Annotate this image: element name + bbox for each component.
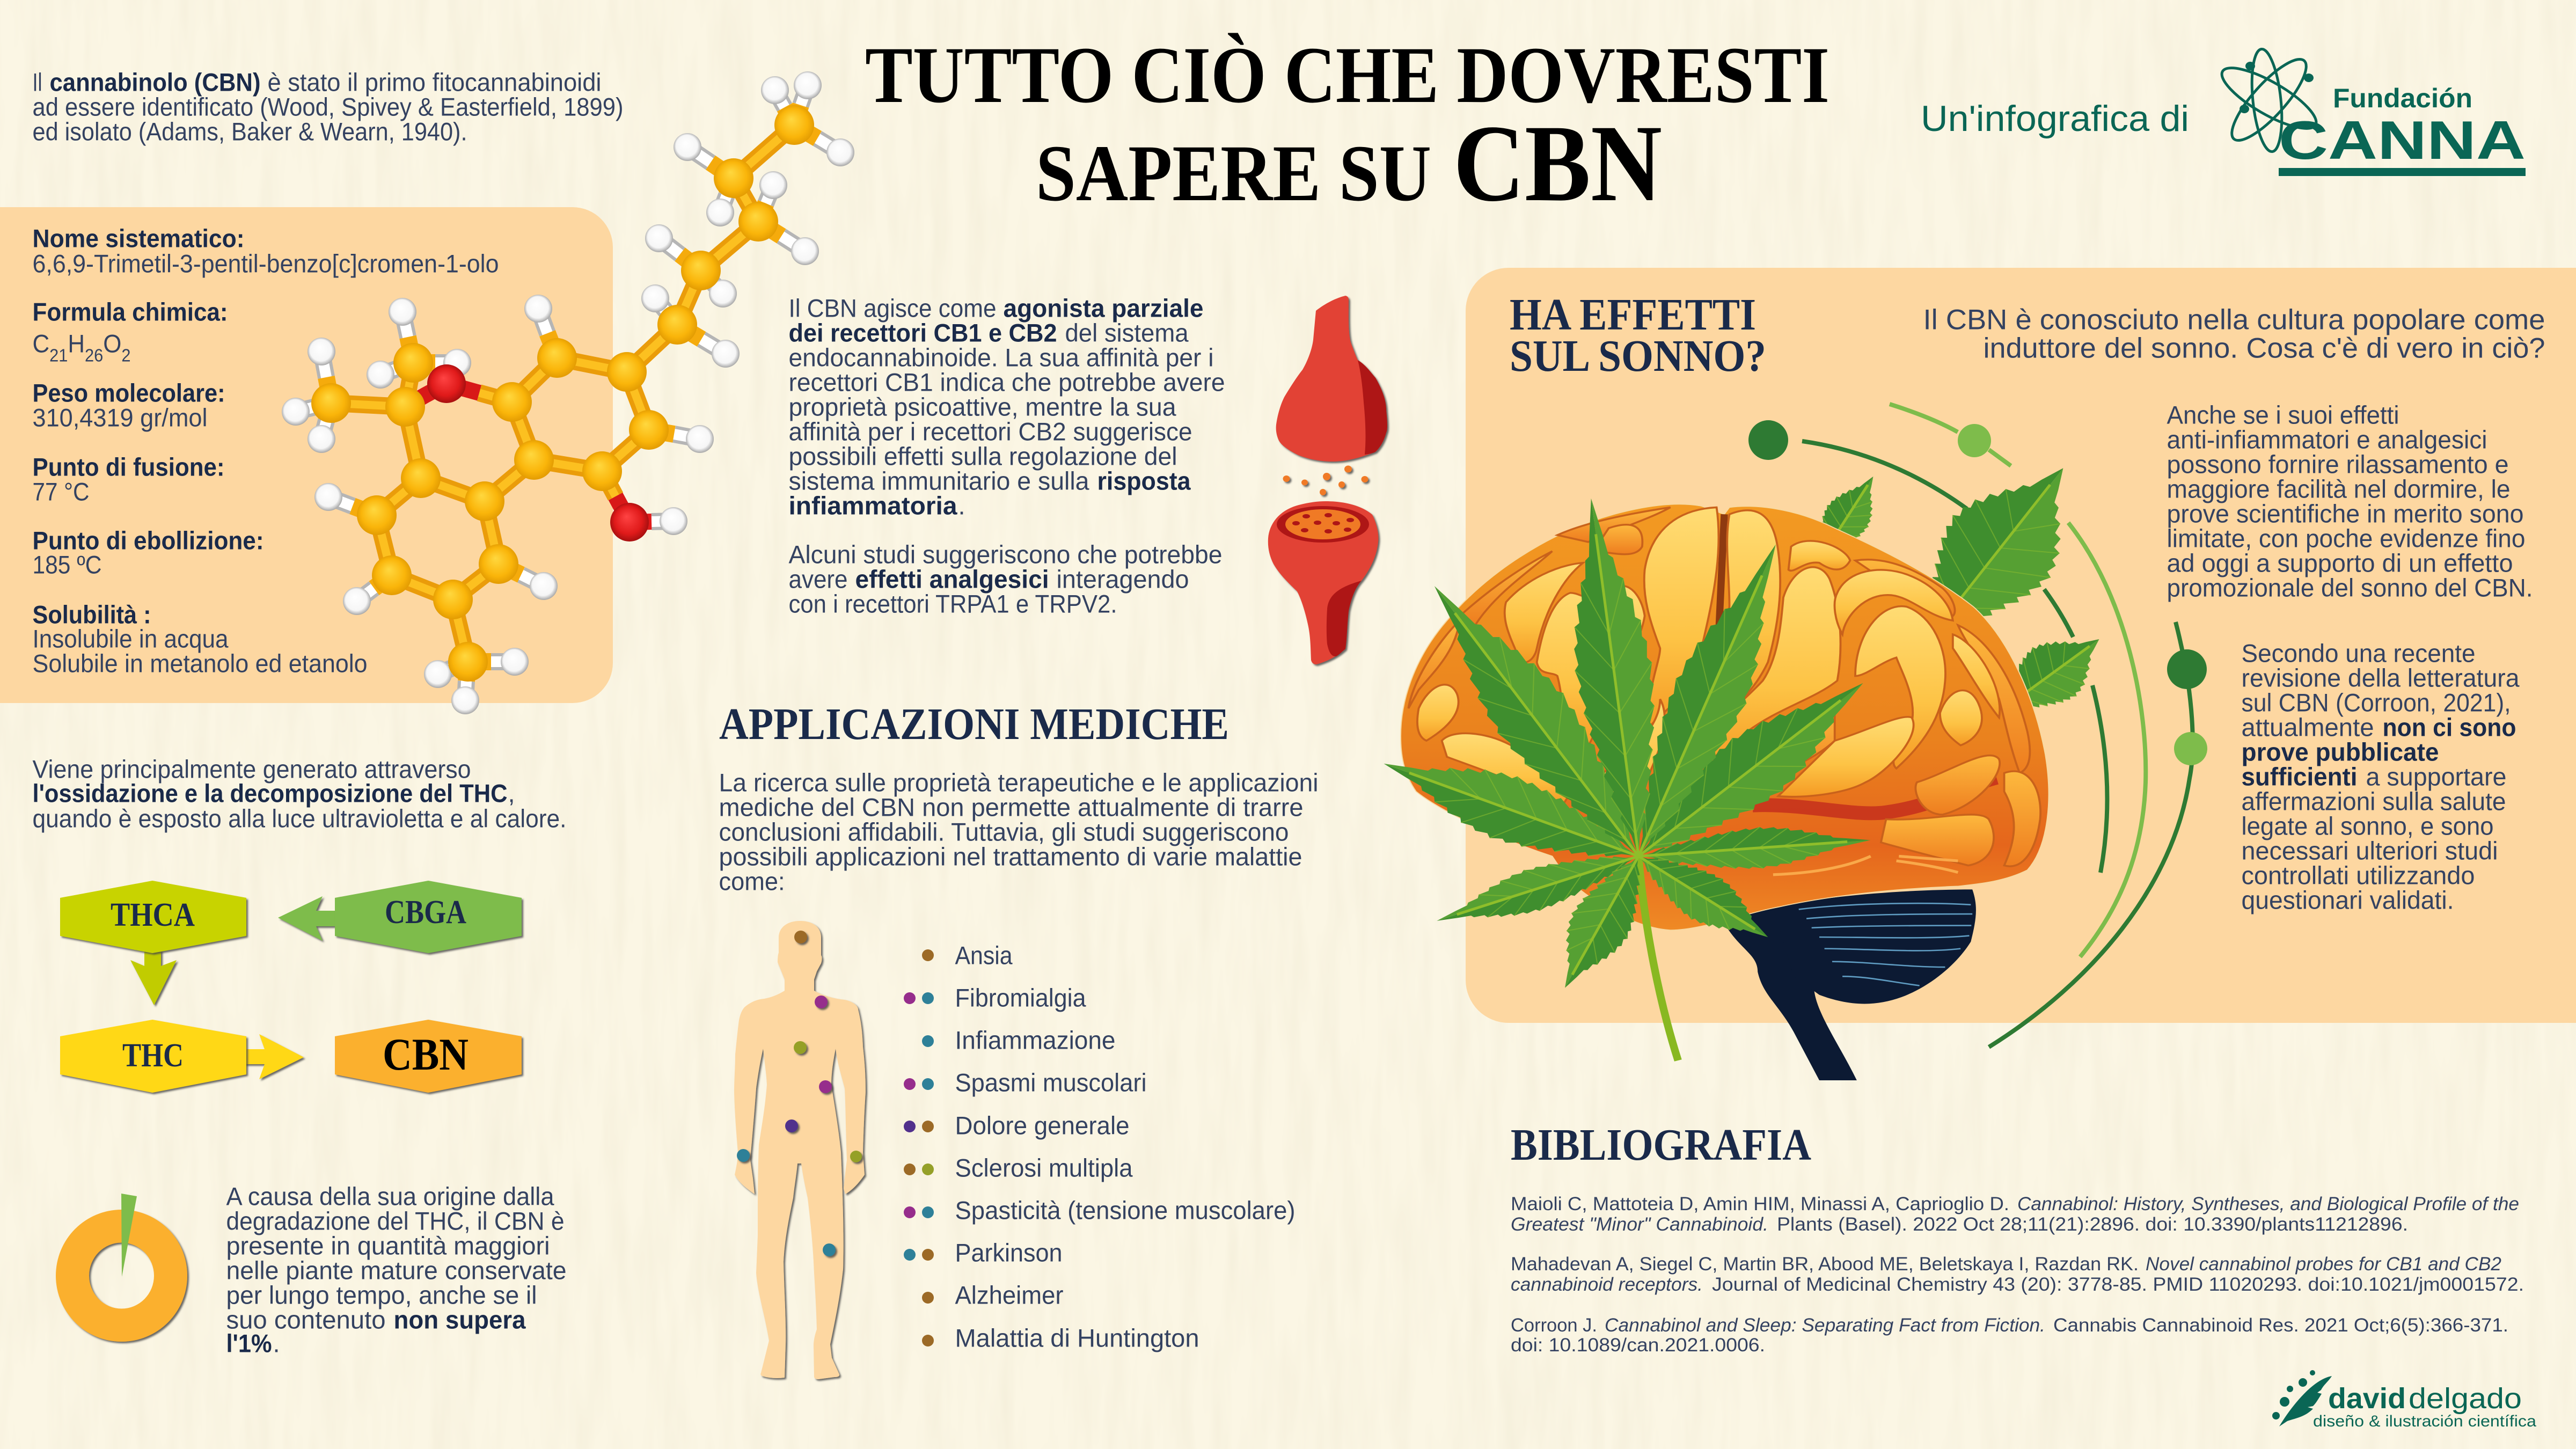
text: literature review: prove pubblicate xyxy=(2241,737,2439,766)
text: how CBN forms: l'ossidazione e la decomposizione del THC xyxy=(32,779,508,807)
text: sleep question xyxy=(1923,304,2545,364)
title: TUTTO CIÒ CHE DOVRESTI xyxy=(865,31,1829,120)
text: how CBN acts: recettori CB1 indica che potrebbe avere xyxy=(789,368,1225,396)
logo: Fundación CANNA: Fundación xyxy=(2333,83,2472,113)
bibliography references: Maioli C, Mattoteia D, Amin HIM, Minassi A, Caprioglio D. xyxy=(1511,1194,2009,1214)
box: THC xyxy=(60,1020,246,1093)
brain hemispheres xyxy=(1401,504,2048,930)
text: medical applications intro: conclusioni affidabili. Tuttavia, gli studi suggeriscono xyxy=(719,818,1289,846)
bibliography references: Cannabinol: History, Syntheses, and Biological Profile of the xyxy=(2017,1194,2519,1214)
list of conditions: Fibromialgia xyxy=(955,983,1086,1012)
text: anti-inflammatory effects xyxy=(2167,400,2533,602)
box: CBGA: CBGA xyxy=(385,894,466,931)
list of conditions: Spasticità (tensione muscolare) xyxy=(955,1196,1296,1225)
box: THCA xyxy=(60,881,246,953)
panel: chemical properties xyxy=(0,207,613,703)
bibliography references: cannabinoid receptors. xyxy=(1511,1274,1703,1295)
arrow: THC to CBN xyxy=(243,1034,304,1079)
chemical properties list: C xyxy=(32,330,50,357)
human body with marked points xyxy=(734,921,866,1379)
icon: synapse xyxy=(1268,296,1387,664)
title: SAPERE SU xyxy=(1036,129,1431,218)
chemical properties list: Solubile in metanolo ed etanolo xyxy=(32,649,367,677)
logo: david delgado xyxy=(2272,1370,2536,1430)
logo: david delgado: diseño & ilustración científica xyxy=(2313,1413,2536,1430)
list of conditions: Alzheimer xyxy=(955,1280,1064,1309)
text: how CBN acts: dei recettori CB1 e CB2 xyxy=(789,319,1057,347)
text: how CBN acts: effetti analgesici xyxy=(855,565,1049,594)
text: anti-inflammatory effects: promozionale del sonno del CBN. xyxy=(2167,573,2533,602)
chemical properties list: Solubilità : xyxy=(32,600,151,629)
text: how CBN acts: . xyxy=(958,492,965,519)
text: medical applications intro xyxy=(719,769,1318,895)
text: how CBN acts: interagendo xyxy=(1056,565,1189,594)
chemical properties list xyxy=(32,224,499,677)
bibliography references: Greatest "Minor" Cannabinoid. xyxy=(1511,1214,1768,1235)
text: anti-inflammatory effects: prove scientifiche in merito sono xyxy=(2167,499,2523,528)
text: how CBN acts: con i recettori TRPA1 e TRPV2. xyxy=(789,589,1117,618)
bibliography references: doi: 10.1089/can.2021.0006. xyxy=(1511,1335,1765,1356)
text: CBN content: degradazione del THC, il CBN è xyxy=(226,1206,565,1235)
text: how CBN acts: endocannabinoide. La sua affinità per i xyxy=(789,343,1214,371)
box: THCA: THCA xyxy=(111,897,195,933)
text: CBN content xyxy=(226,1182,567,1358)
background leaves xyxy=(1798,437,2121,733)
bibliography references: Cannabinol and Sleep: Separating Fact from Fiction. xyxy=(1605,1315,2045,1336)
intro text: Il xyxy=(32,68,42,97)
text: how CBN acts: possibili effetti sulla regolazione del xyxy=(789,442,1177,470)
intro text xyxy=(32,68,624,146)
heading: medical applications: APPLICAZIONI MEDICHE xyxy=(719,699,1229,749)
panel: sleep effects xyxy=(1466,268,2576,1023)
list of conditions: Sclerosi multipla xyxy=(955,1154,1133,1182)
list of conditions xyxy=(904,941,1296,1352)
text: how CBN acts: proprietà psicoattive, mentre la sua xyxy=(789,393,1176,421)
list of conditions: Infiammazione xyxy=(955,1026,1115,1054)
box: CBN xyxy=(335,1020,522,1093)
chemical properties list: 6,6,9-Trimetil-3-pentil-benzo[c]cromen-1-olo xyxy=(32,249,499,278)
text: anti-inflammatory effects: possono fornire rilassamento e xyxy=(2167,450,2508,479)
chemical properties list: Punto di ebollizione: xyxy=(32,526,264,555)
text: how CBN forms: , xyxy=(508,779,515,807)
chemical properties list: 2 xyxy=(121,346,131,365)
text: literature review: sul CBN (Corroon, 2021), xyxy=(2241,688,2511,717)
text: CBN content: . xyxy=(273,1329,280,1358)
intro text: cannabinolo (CBN) xyxy=(49,68,261,97)
bibliography references: Novel cannabinol probes for CB1 and CB2 xyxy=(2146,1254,2501,1275)
text: anti-inflammatory effects: anti-infiammatori e analgesici xyxy=(2167,425,2487,454)
chemical properties list: Formula chimica: xyxy=(32,297,228,326)
chemical properties list: Punto di fusione: xyxy=(32,453,224,481)
text: anti-inflammatory effects: ad oggi a supporto di un effetto xyxy=(2167,548,2513,577)
intro text: è stato il primo fitocannabinoidi xyxy=(267,68,601,97)
logo: david delgado: david xyxy=(2328,1382,2406,1415)
text: medical applications intro: mediche del CBN non permette attualmente di trarre xyxy=(719,793,1303,821)
text: how CBN acts: affinità per i recettori CB2 suggerisce xyxy=(789,418,1192,445)
chemical properties list: 77 °C xyxy=(32,478,89,506)
diagram: cannabinoid pathway xyxy=(60,881,522,1093)
text: how CBN acts: risposta xyxy=(1097,467,1191,495)
title xyxy=(865,31,1829,224)
bibliography references: Plants (Basel). 2022 Oct 28;11(21):2896. doi: 10.3390/plants11212896. xyxy=(1777,1214,2408,1235)
list of conditions: Parkinson xyxy=(955,1239,1063,1267)
chemical properties list: Peso molecolare: xyxy=(32,379,225,407)
text: how CBN acts: Il CBN agisce come xyxy=(789,294,996,322)
chemical properties list: O xyxy=(103,330,121,357)
molecule: cannabinol ball and stick model xyxy=(282,71,854,714)
text: sleep question: Il CBN è conosciuto nella cultura popolare come xyxy=(1923,304,2545,336)
text: anti-inflammatory effects: Anche se i suoi effetti xyxy=(2167,400,2399,429)
chemical properties list: H xyxy=(68,330,85,357)
bibliography references: Journal of Medicinal Chemistry 43 (20): 3778-85. PMID 11020293. doi:10.1021/jm0001572. xyxy=(1712,1274,2524,1295)
heading: bibliography: BIBLIOGRAFIA xyxy=(1511,1120,1811,1170)
bibliography references: Mahadevan A, Siegel C, Martin BR, Abood ME, Beletskaya I, Razdan RK. xyxy=(1511,1254,2139,1275)
text: literature review xyxy=(2241,639,2520,914)
box: THC: THC xyxy=(122,1037,184,1074)
text: literature review: legate al sonno, e sono xyxy=(2241,811,2493,840)
logo: Fundación CANNA xyxy=(2214,48,2526,176)
text: literature review: attualmente xyxy=(2241,713,2374,742)
text: literature review: Secondo una recente xyxy=(2241,639,2475,668)
bibliography references: Cannabis Cannabinoid Res. 2021 Oct;6(5):366-371. xyxy=(2053,1315,2508,1336)
illustration: brain with cannabis leaf xyxy=(1370,437,2121,1080)
chemical properties list: Nome sistematico: xyxy=(32,224,245,252)
text: literature review: sufficienti xyxy=(2241,762,2357,791)
text: how CBN forms: Viene principalmente generato attraverso xyxy=(32,755,471,784)
text: literature review: revisione della letteratura xyxy=(2241,663,2520,692)
text: literature review: a supportare xyxy=(2366,762,2506,791)
chemical properties list: 21 xyxy=(49,346,68,365)
list of conditions: Spasmi muscolari xyxy=(955,1068,1146,1097)
text: how CBN acts: infiammatoria xyxy=(789,492,957,519)
cannabis leaf xyxy=(1370,494,1889,1060)
text: literature review: questionari validati. xyxy=(2241,885,2454,914)
heading: effects on sleep: SUL SONNO? xyxy=(1510,331,1766,381)
text: how CBN forms: quando è esposto alla luce ultravioletta e al calore. xyxy=(32,804,567,833)
intro text: ed isolato (Adams, Baker & Wearn, 1940). xyxy=(32,117,467,146)
box: CBN: CBN xyxy=(383,1029,469,1080)
text: literature review: affermazioni sulla salute xyxy=(2241,787,2506,816)
heading: effects on sleep xyxy=(1510,290,1766,381)
arrow: CBGA to THCA xyxy=(278,896,338,941)
text: literature review: non ci sono xyxy=(2383,713,2516,742)
text: literature review: controllati utilizzando xyxy=(2241,861,2475,890)
list of conditions: Ansia xyxy=(955,941,1013,969)
intro text: ad essere identificato (Wood, Spivey & Easterfield, 1899) xyxy=(32,92,624,121)
text: medical applications intro: possibili applicazioni nel trattamento di varie malattie xyxy=(719,843,1302,870)
donut chart: CBN share xyxy=(56,1194,187,1342)
text: CBN content: A causa della sua origine dalla xyxy=(226,1182,554,1211)
heading: effects on sleep: HA EFFETTI xyxy=(1510,290,1756,340)
text: anti-inflammatory effects: maggiore facilità nel dormire, le xyxy=(2167,474,2511,503)
text: how CBN acts: del sistema xyxy=(1065,319,1189,347)
arrow: THCA to THC xyxy=(130,950,177,1005)
text: how CBN forms xyxy=(32,755,567,833)
text: medical applications intro: come: xyxy=(719,867,785,895)
text: CBN content: presente in quantità maggiori xyxy=(226,1231,550,1260)
text: CBN content: suo contenuto xyxy=(226,1305,385,1334)
text: how CBN acts: sistema immunitario e sulla xyxy=(789,467,1089,495)
text: how CBN acts: Alcuni studi suggeriscono che potrebbe xyxy=(789,540,1223,569)
text: anti-inflammatory effects: limitate, con poche evidenze fino xyxy=(2167,524,2526,553)
chemical properties list: Insolubile in acqua xyxy=(32,625,229,653)
text: CBN content: per lungo tempo, anche se il xyxy=(226,1280,537,1309)
text: sleep question: induttore del sonno. Cosa c'è di vero in ciò? xyxy=(1984,333,2545,364)
text: how CBN acts: agonista parziale xyxy=(1004,294,1203,322)
text: literature review: necessari ulteriori studi xyxy=(2241,836,2498,865)
decorative orbit arcs and dots xyxy=(1748,404,2207,1047)
list of conditions: Dolore generale xyxy=(955,1111,1129,1140)
title: CBN xyxy=(1453,103,1662,224)
text: how CBN acts xyxy=(789,294,1225,618)
chemical properties list: 26 xyxy=(85,346,103,365)
text: CBN content: l'1% xyxy=(226,1329,272,1358)
bibliography references xyxy=(1511,1194,2524,1356)
text: how CBN acts: avere xyxy=(789,565,848,594)
byline: Un'infografica di xyxy=(1921,98,2189,139)
text: CBN content: non supera xyxy=(394,1305,526,1334)
list of conditions: Malattia di Huntington xyxy=(955,1323,1199,1352)
bibliography references: Corroon J. xyxy=(1511,1315,1597,1336)
chemical properties list: 310,4319 gr/mol xyxy=(32,404,207,431)
box: CBGA xyxy=(335,881,522,953)
chemical properties list: 185 ºC xyxy=(32,551,102,579)
brain stem and cerebellum xyxy=(1722,889,1976,1080)
text: medical applications intro: La ricerca sulle proprietà terapeutiche e le applicazioni xyxy=(719,769,1318,796)
text: CBN content: nelle piante mature conservate xyxy=(226,1256,567,1285)
logo: david delgado: delgado xyxy=(2409,1382,2522,1415)
logo: Fundación CANNA: CANNA xyxy=(2279,111,2526,171)
